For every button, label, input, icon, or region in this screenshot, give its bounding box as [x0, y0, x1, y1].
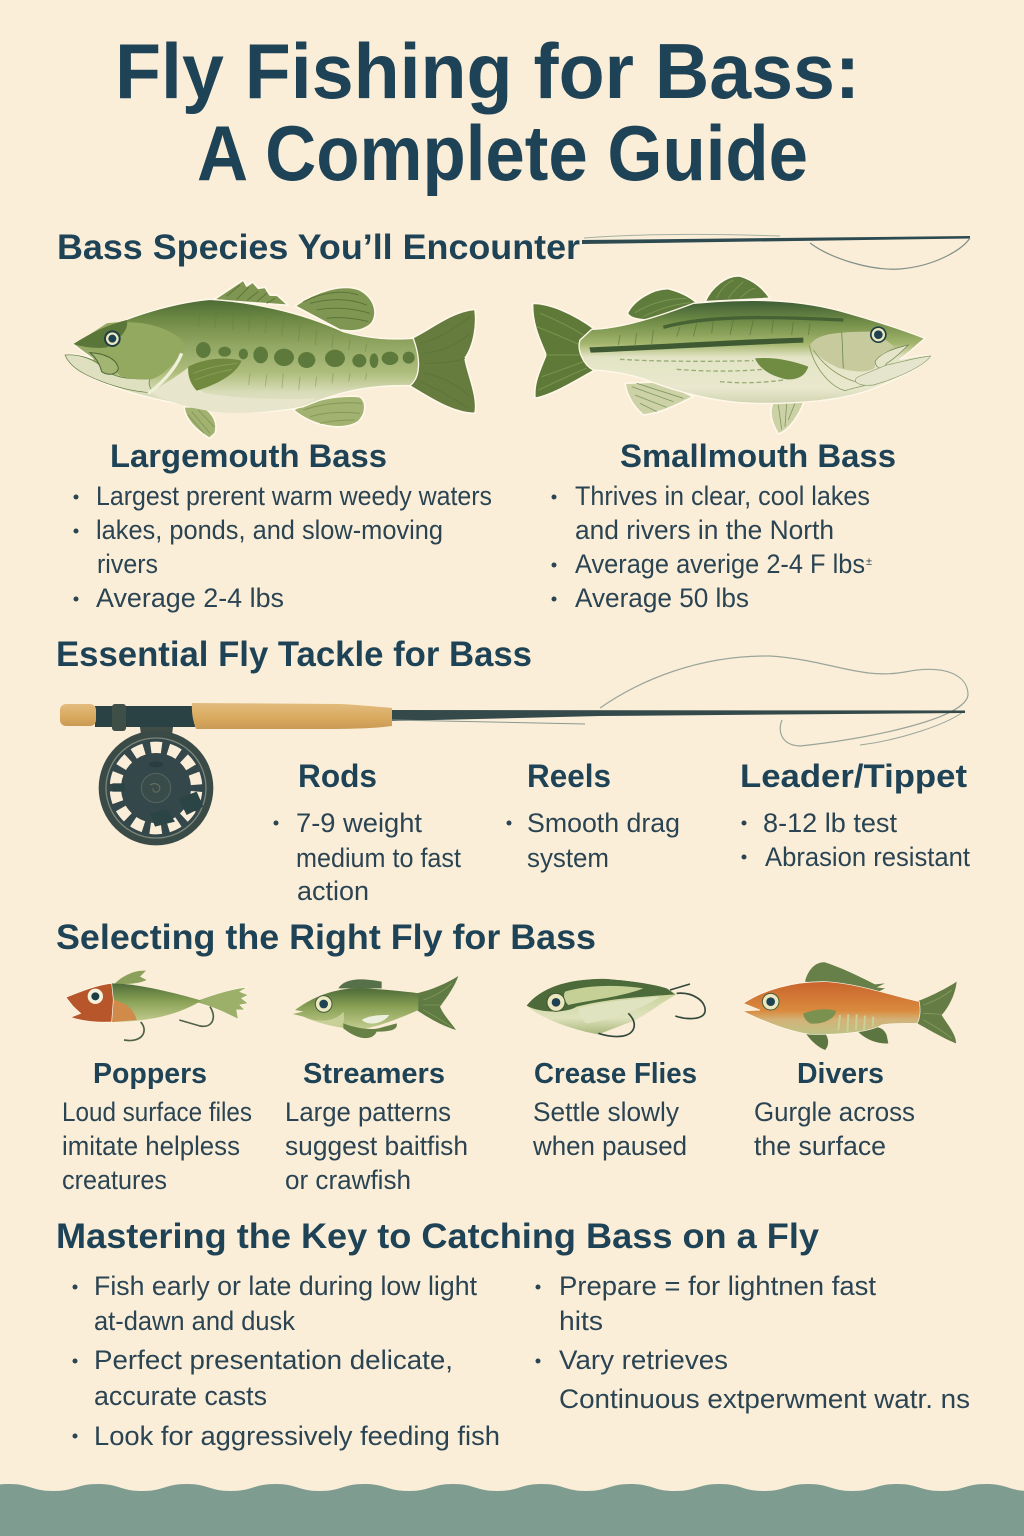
text: divers description: [754, 1097, 915, 1161]
text: crease flies description: Settle slowly: [533, 1097, 679, 1127]
text: streamers description: [285, 1097, 468, 1195]
illustration: fly rod, line and reel: [60, 656, 968, 845]
list: tips right column: Vary retrieves: [559, 1345, 728, 1375]
heading: divers: Divers: [797, 1058, 884, 1090]
icon: diver fly: [743, 962, 957, 1050]
list: smallmouth facts: ±: [866, 556, 872, 568]
heading: essential tackle: Essential Fly Tackle for Bass: [56, 635, 532, 674]
list: smallmouth facts: and rivers in the North: [575, 515, 834, 545]
list: largemouth facts: Average 2-4 lbs: [96, 583, 284, 613]
list: reels facts: Smooth drag: [527, 808, 680, 838]
list: tips left column: [72, 1271, 500, 1451]
heading: poppers: Poppers: [93, 1058, 207, 1090]
text: poppers description: [62, 1097, 252, 1195]
panel: crease flies: [532, 1058, 697, 1161]
list: tips left column: Fish early or late during low light: [94, 1271, 477, 1301]
list: tips right column: [536, 1271, 970, 1414]
heading: reels: Reels: [527, 758, 611, 794]
text: poppers description: creatures: [62, 1165, 167, 1195]
list: largemouth facts: Largest prerent warm weedy waters: [96, 481, 492, 511]
text: divers description: Gurgle across: [754, 1097, 915, 1127]
panel: largemouth bass: [74, 438, 492, 613]
illustration: largemouth bass: [65, 280, 476, 438]
text: streamers description: or crawfish: [285, 1165, 411, 1195]
text: crease flies description: [532, 1097, 687, 1161]
list: largemouth facts: rivers: [97, 549, 158, 579]
panel: reels: [506, 758, 680, 873]
list: leader facts: Abrasion resistant: [765, 842, 970, 872]
heading: selecting fly: Selecting the Right Fly for Bass: [56, 918, 596, 957]
icon: popper fly: [66, 971, 248, 1041]
list: rods facts: action: [297, 876, 369, 906]
heading: largemouth bass: Largemouth Bass: [110, 438, 387, 474]
heading: smallmouth bass: Smallmouth Bass: [620, 438, 896, 474]
heading: bass species: Bass Species You’ll Encounter: [57, 228, 580, 267]
list: tips left column: Look for aggressively feeding fish: [94, 1421, 500, 1451]
list: smallmouth facts: [552, 481, 872, 613]
list: largemouth facts: [74, 481, 492, 613]
text: poppers description: imitate helpless: [62, 1131, 240, 1161]
list: leader facts: 8-12 lb test: [763, 808, 897, 838]
list: tips right column: Continuous extperwment watr. ns: [559, 1384, 970, 1414]
heading: crease flies: Crease Flies: [534, 1058, 697, 1090]
list: smallmouth facts: Average 50 lbs: [575, 583, 749, 613]
list: tips left column: Perfect presentation delicate,: [94, 1345, 453, 1375]
list: tips left column: accurate casts: [94, 1381, 267, 1411]
title: Fly Fishing for Bass:: [115, 27, 860, 115]
text: poppers description: Loud surface files: [62, 1097, 252, 1127]
text: streamers description: Large patterns: [285, 1097, 451, 1127]
heading: streamers: Streamers: [303, 1058, 445, 1090]
title: A Complete Guide: [197, 109, 808, 197]
list: rods facts: [274, 808, 461, 906]
text: crease flies description: when paused: [532, 1131, 687, 1161]
icon: streamer fly: [293, 976, 458, 1038]
panel: poppers: [62, 1058, 252, 1195]
list: rods facts: medium to fast: [296, 843, 461, 873]
list: tips left column: at-dawn and dusk: [94, 1306, 295, 1336]
heading: rods: Rods: [298, 758, 377, 794]
list: rods facts: 7-9 weight: [296, 808, 422, 838]
title: [115, 27, 860, 197]
panel: divers: [754, 1058, 915, 1161]
list: smallmouth facts: Average averige 2-4 F lbs: [575, 549, 865, 579]
water wave footer: [0, 1484, 1024, 1536]
list: reels facts: system: [527, 843, 609, 873]
panel: smallmouth bass: [552, 438, 896, 613]
icon: fly rod and line: [582, 234, 970, 269]
heading: leader/tippet: Leader/Tippet: [740, 758, 967, 794]
list: tips right column: hits: [559, 1306, 603, 1336]
panel: leader and tippet: [740, 758, 970, 872]
list: smallmouth facts: Thrives in clear, cool lakes: [575, 481, 870, 511]
heading: mastering: Mastering the Key to Catching Bass on a Fly: [56, 1217, 820, 1256]
icon: crease fly: [527, 979, 705, 1037]
text: divers description: the surface: [754, 1131, 886, 1161]
icon: fly reel: [99, 731, 213, 845]
illustration: smallmouth bass: [533, 276, 931, 434]
list: leader facts: [742, 808, 970, 872]
list: largemouth facts: lakes, ponds, and slow-moving: [96, 515, 443, 545]
panel: streamers: [285, 1058, 468, 1195]
text: streamers description: suggest baitfish: [285, 1131, 468, 1161]
list: tips right column: Prepare = for lightnen fast: [559, 1271, 877, 1301]
panel: rods: [274, 758, 461, 906]
list: reels facts: [506, 808, 680, 873]
